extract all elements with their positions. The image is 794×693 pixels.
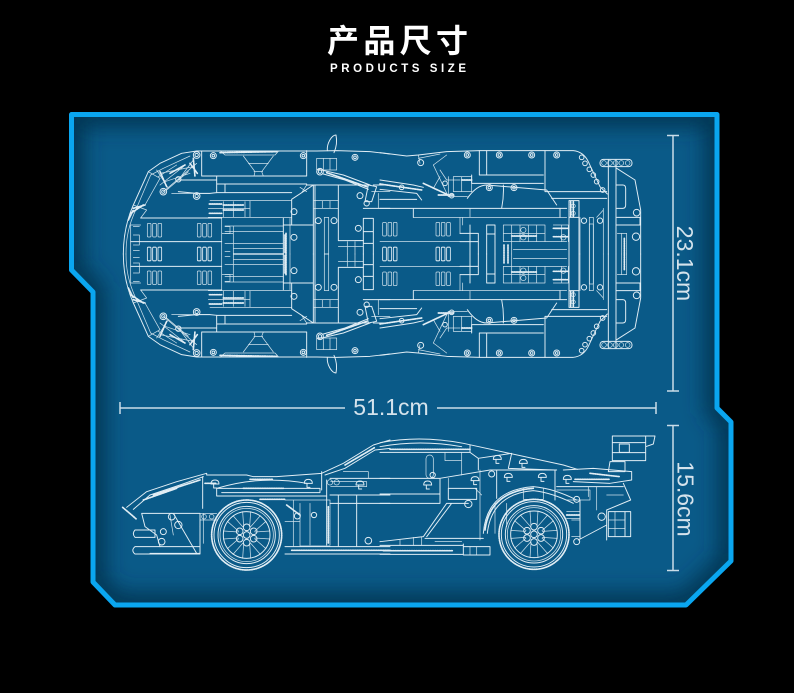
dimension: length 51.1cm xyxy=(120,394,656,420)
dimension: width 23.1cm xyxy=(667,136,698,391)
subtitle: PRODUCTS SIZE xyxy=(330,63,466,75)
title xyxy=(327,23,468,75)
panel: blueprint xyxy=(60,100,750,620)
title: 产品尺寸 xyxy=(327,23,468,59)
car side view xyxy=(123,436,655,570)
dimension: height 15.6cm: 15.6cm xyxy=(672,461,698,537)
dimension: length 51.1cm: 51.1cm xyxy=(353,394,429,420)
car top view xyxy=(123,135,641,373)
dimension: width 23.1cm: 23.1cm xyxy=(672,226,698,301)
dimension: height 15.6cm xyxy=(667,426,698,570)
